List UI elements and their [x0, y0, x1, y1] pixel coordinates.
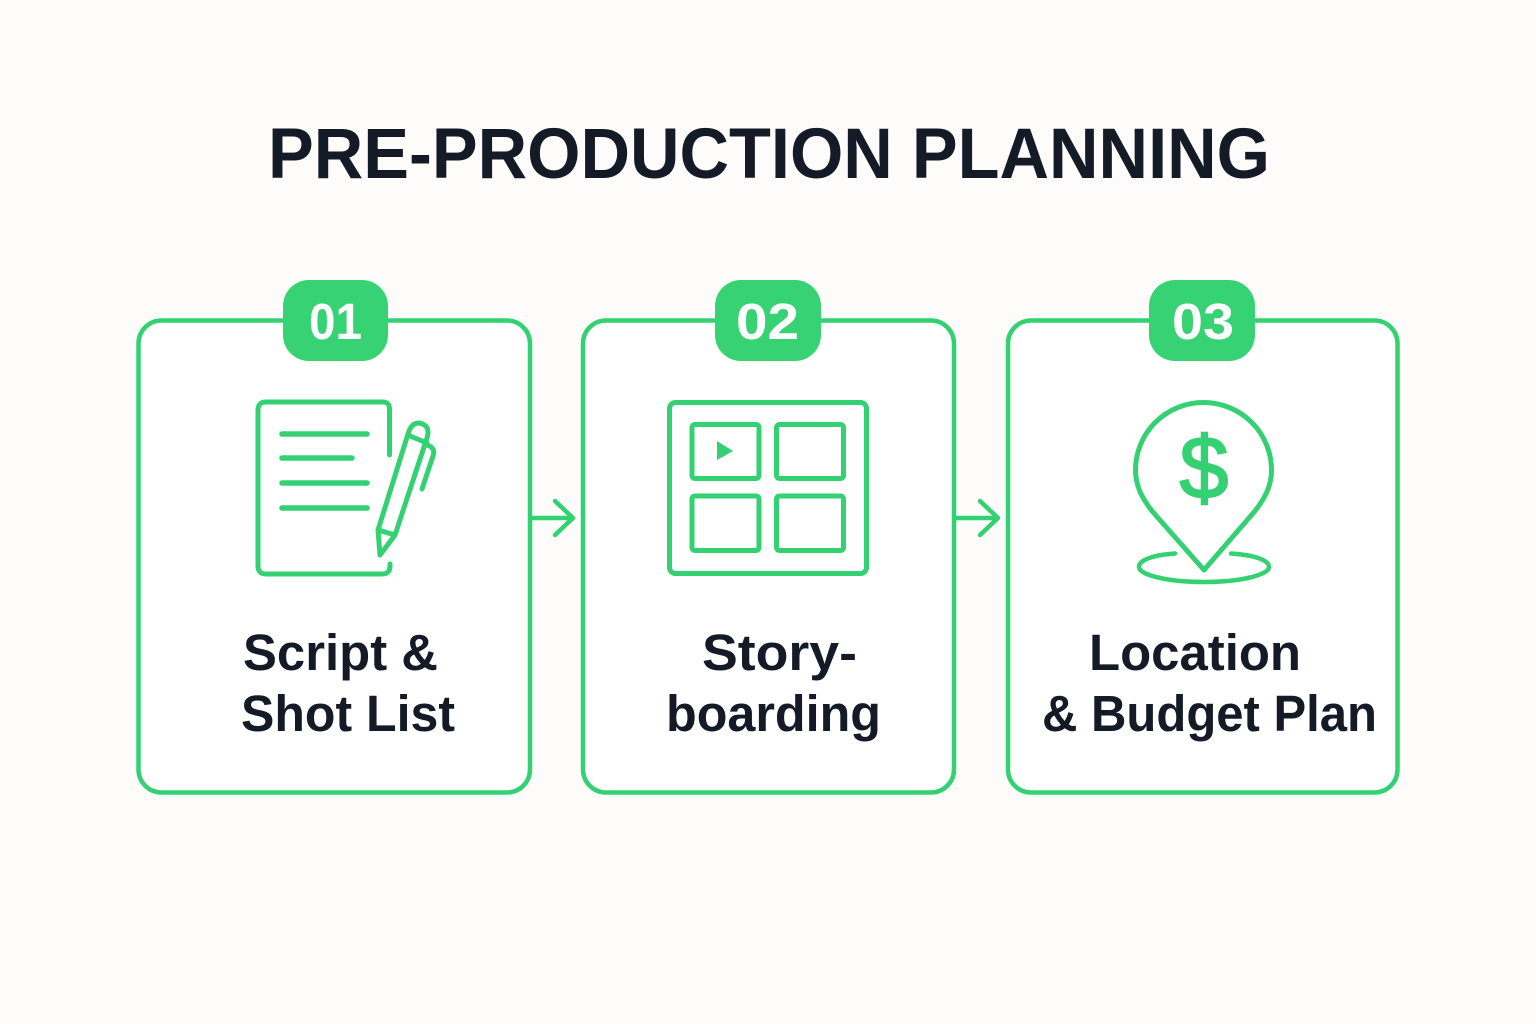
icon: document and pen: [258, 402, 434, 574]
badge 02: [715, 280, 821, 361]
panel: step 2 storyboarding: [583, 280, 954, 792]
badge 01: 01: [309, 293, 362, 350]
label: storyboarding: boarding: [666, 685, 881, 742]
arrow: step 2 to step 3: [956, 501, 998, 535]
label: script and shot list: Shot List: [241, 685, 455, 742]
panel: step 3 location and budget plan: [1008, 280, 1398, 792]
label: location and budget plan: [1042, 624, 1377, 742]
arrow: step 1 to step 2: [532, 501, 573, 535]
badge 03: [1149, 280, 1255, 361]
label: location and budget plan: Location: [1089, 624, 1301, 681]
title: PRE-PRODUCTION PLANNING: [268, 115, 1270, 194]
badge 02: 02: [736, 293, 799, 350]
icon: map pin with dollar sign: $: [1180, 418, 1228, 517]
panel: step 1 script and shot list: [138, 280, 530, 792]
label: storyboarding: [666, 624, 881, 742]
panel frame 1: [138, 320, 530, 792]
badge 01: [283, 280, 388, 361]
icon: map pin with dollar sign: [1136, 402, 1272, 582]
panel frame 3: [1008, 320, 1398, 792]
label: location and budget plan: & Budget Plan: [1042, 685, 1377, 742]
badge 03: 03: [1172, 293, 1234, 350]
label: script and shot list: [241, 624, 455, 742]
icon: storyboard frames: [670, 402, 866, 574]
panel frame 2: [583, 320, 954, 792]
label: storyboarding: Story-: [702, 624, 857, 681]
label: script and shot list: Script &: [243, 624, 438, 681]
